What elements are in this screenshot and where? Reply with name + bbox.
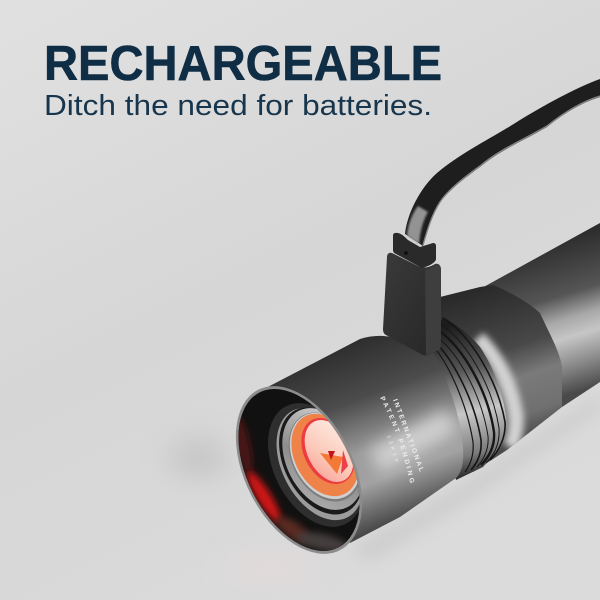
USB plug: [383, 253, 441, 355]
USB connector neck: [393, 233, 436, 268]
flashlight: [236, 79, 600, 554]
flashlight collar: [436, 285, 562, 472]
engraved patent text: INTERNATIONAL: [391, 398, 425, 473]
engraved patent text: PATENT PENDING: [380, 396, 414, 483]
engraved patent text: 13K2K: [385, 435, 400, 464]
front bezel ring: [210, 365, 388, 575]
inner cup: [238, 389, 360, 551]
infographic scene: [46, 45, 600, 559]
flashlight body: [480, 223, 600, 407]
subtitle: Ditch the need for batteries.: [44, 90, 432, 122]
red lens: [291, 414, 357, 496]
USB plug side highlight: [425, 264, 441, 355]
flashlight head: [262, 336, 463, 543]
threaded neck: [428, 317, 506, 480]
title: RECHARGEABLE: [44, 37, 442, 91]
reflector rings: [268, 403, 360, 527]
USB cable: [405, 79, 600, 246]
